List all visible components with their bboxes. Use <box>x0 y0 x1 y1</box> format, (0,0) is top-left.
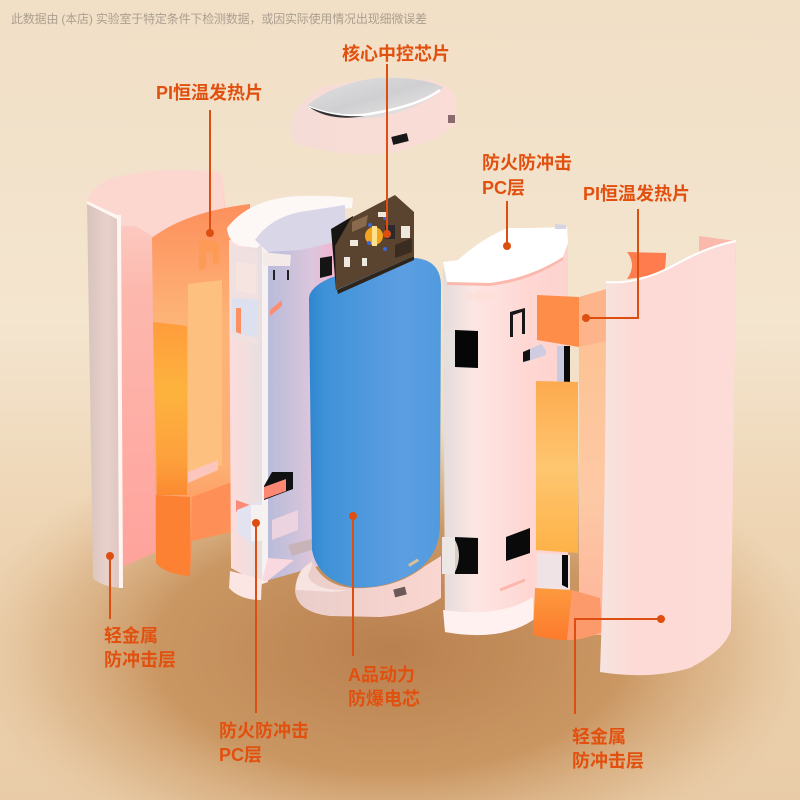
callout: fireproof PC bottom <box>219 519 309 765</box>
callout: PI heater right: PI恒温发热片 <box>583 183 690 204</box>
right orange heating film <box>533 252 666 640</box>
callout: metal layer right <box>572 615 665 771</box>
callout: PI heater right <box>582 183 690 322</box>
callout: battery <box>348 512 420 709</box>
callout: core control chip: 核心中控芯片 <box>342 43 450 64</box>
circuit board <box>331 195 414 294</box>
callout: fireproof PC top: PC层 <box>482 178 525 198</box>
callout: fireproof PC top <box>482 152 572 250</box>
battery base tray <box>295 556 441 617</box>
callout: core control chip <box>342 43 450 238</box>
disclaimer text: 此数据由 (本店) 实验室于特定条件下检测数据，或因实际使用情况出现细微误差 <box>11 11 427 26</box>
callout: metal layer left <box>104 552 176 670</box>
callout: PI heater left <box>156 82 263 237</box>
callout: fireproof PC bottom: 防火防冲击 <box>219 720 309 741</box>
left orange heating film <box>152 204 250 576</box>
callout: fireproof PC bottom: PC层 <box>219 745 262 765</box>
table shadow <box>0 425 800 800</box>
top cap with metal button <box>292 78 456 154</box>
callout: metal layer left: 轻金属 <box>104 625 158 646</box>
callout: PI heater left: PI恒温发热片 <box>156 82 263 103</box>
callout: metal layer right: 轻金属 <box>572 726 626 747</box>
callout: fireproof PC top: 防火防冲击 <box>482 152 572 173</box>
right plastic frame <box>442 224 568 635</box>
left plastic frame <box>227 196 353 600</box>
callout: metal layer right: 防冲击层 <box>572 750 644 771</box>
callout: battery: 防爆电芯 <box>348 688 420 709</box>
blue battery cell <box>309 258 441 587</box>
right metal shell <box>600 236 736 675</box>
left metal shell <box>87 170 226 588</box>
callout: battery: A品动力 <box>348 665 415 685</box>
callout: metal layer left: 防冲击层 <box>104 649 176 670</box>
